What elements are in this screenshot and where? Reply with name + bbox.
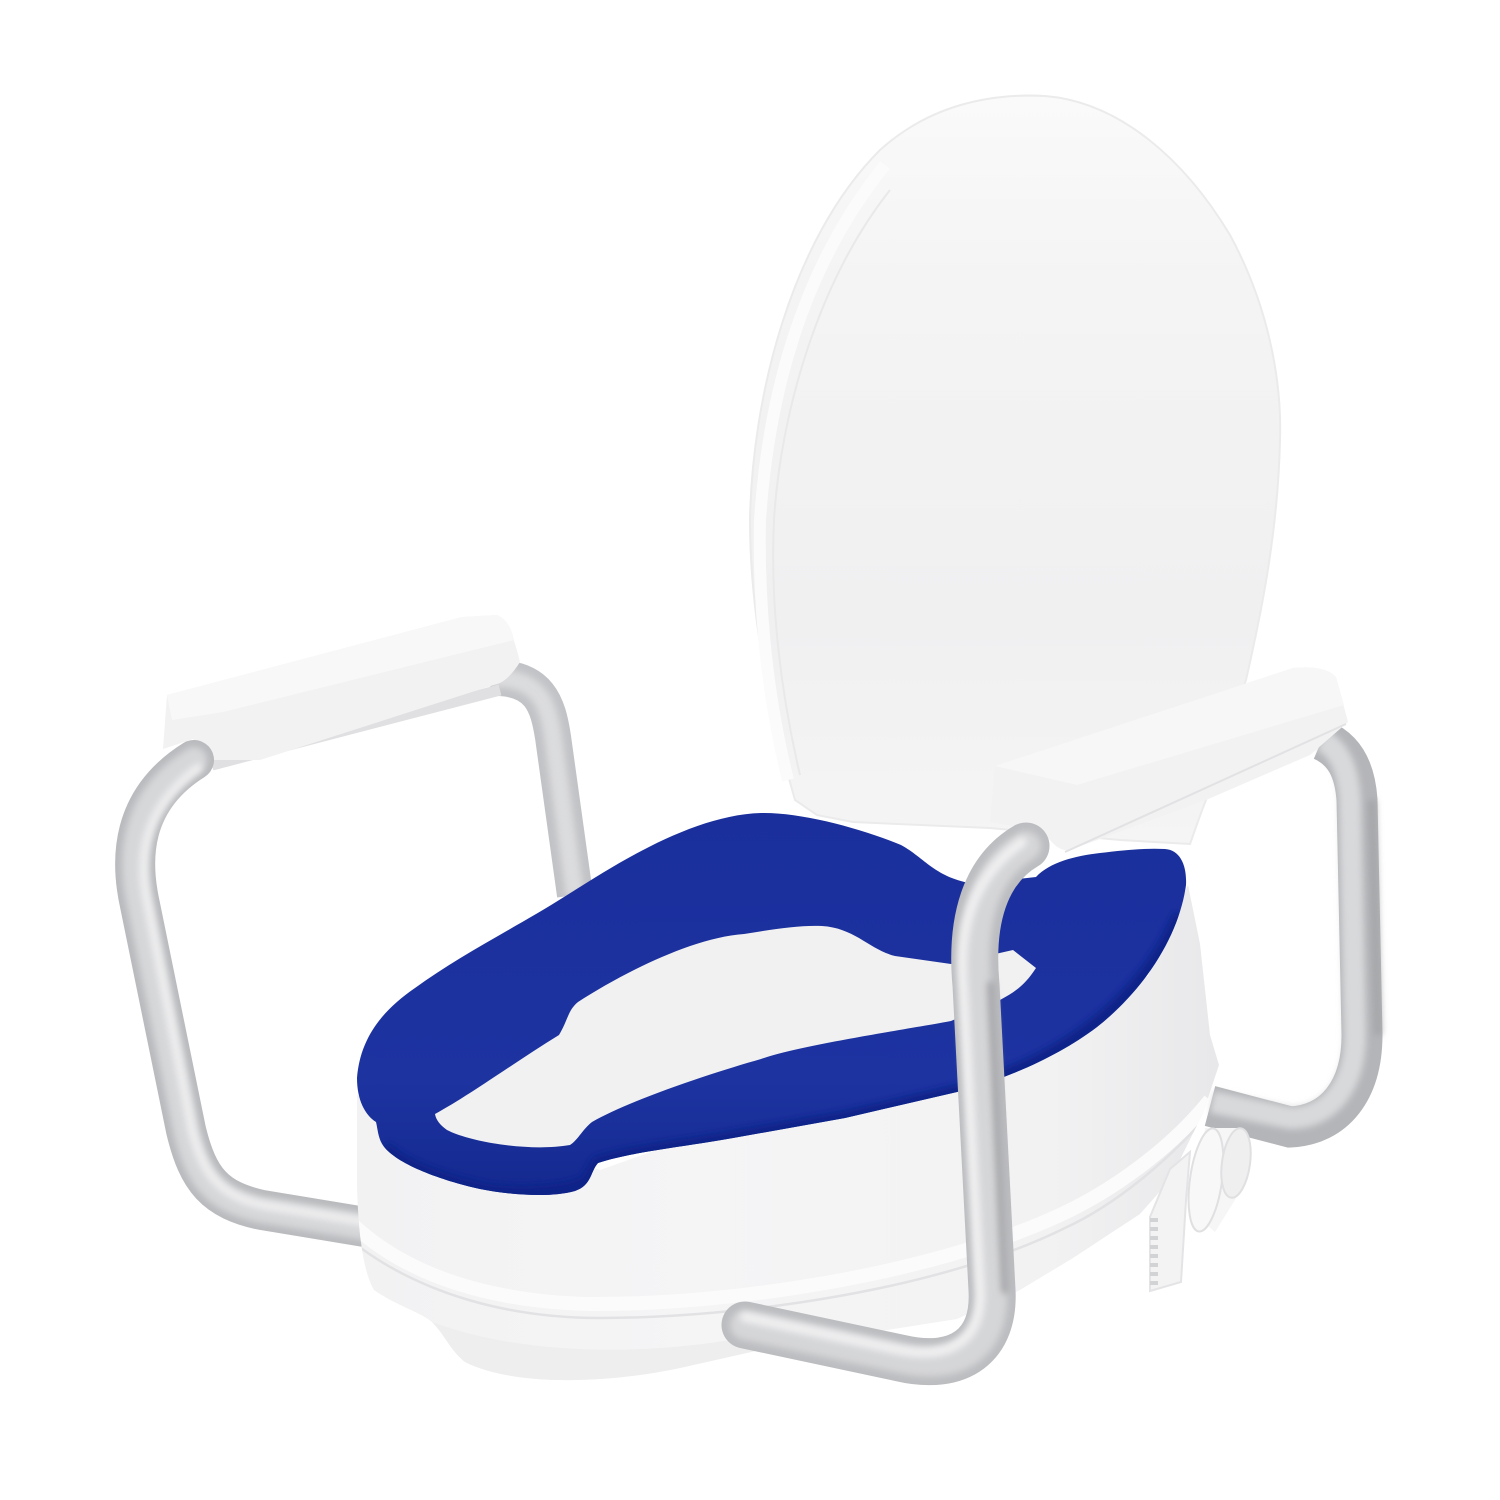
blue seat cushion: [357, 813, 1186, 1195]
left arm pad: [163, 615, 520, 765]
seat riser body: [350, 885, 1219, 1380]
left arm front tube: [135, 760, 365, 1227]
right arm back tube: [1210, 740, 1378, 1127]
toilet lid: [750, 96, 1280, 844]
product illustration: raised toilet seat: [115, 94, 1386, 1386]
left arm back tube: [490, 678, 575, 895]
clamp knob and ratchet strap: [1150, 1126, 1255, 1291]
right arm front tube: [745, 842, 1026, 1362]
right arm pad: [990, 667, 1348, 852]
